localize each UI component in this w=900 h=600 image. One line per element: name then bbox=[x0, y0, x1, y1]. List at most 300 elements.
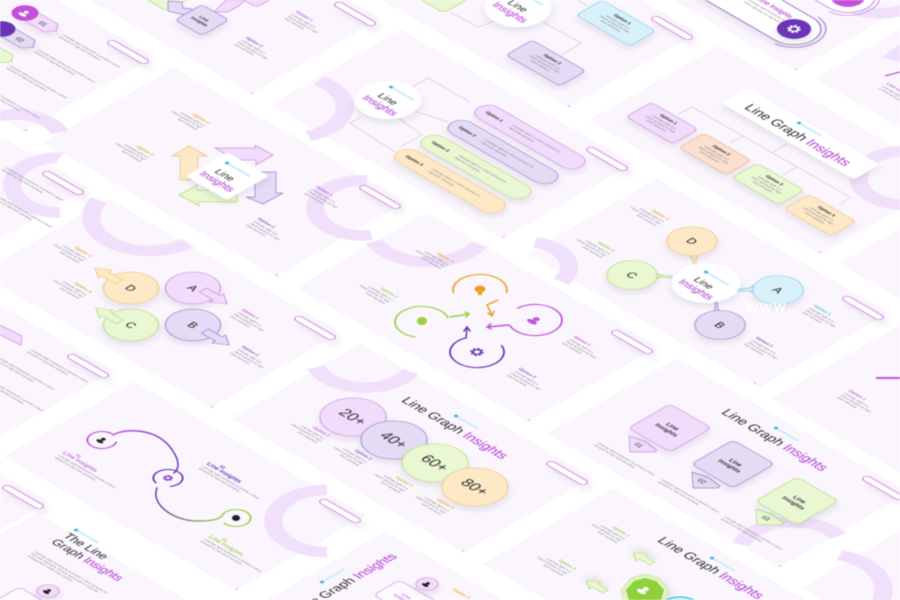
card text: Line bbox=[400, 593, 413, 600]
option 1 text: robust synopsis for high bbox=[290, 423, 323, 442]
curve bottom bbox=[156, 488, 222, 521]
description 03: Leverage agile frameworks to provide a robust bbox=[723, 515, 783, 550]
option 3 text: Option 3 bbox=[73, 282, 94, 294]
bar option 3 bbox=[415, 132, 537, 202]
connector lines bbox=[350, 78, 470, 152]
option 3 text: Leverage agile to a bbox=[382, 474, 409, 490]
option 3 text: level overviews. bbox=[58, 287, 81, 300]
option 2 text: Leverage agile to a bbox=[236, 348, 263, 364]
option 2 text: level overviews. bbox=[233, 43, 256, 56]
panel: curved line timeline bbox=[53, 430, 273, 575]
option 1 text: robust synopsis for high bbox=[306, 190, 339, 209]
footer dots bbox=[24, 68, 822, 590]
option 3 text: level overviews. bbox=[120, 150, 143, 163]
panel: ABCD circles with arrows bbox=[49, 238, 274, 371]
card option 3: robust synopsis for high bbox=[750, 176, 783, 195]
node bulb bbox=[218, 508, 254, 528]
arrow A bbox=[196, 286, 234, 308]
option 2 text: level overviews. bbox=[743, 343, 766, 356]
option 1 text: level overviews. bbox=[296, 431, 319, 444]
circle 20+ bbox=[306, 390, 400, 444]
bubble B: B bbox=[711, 321, 728, 330]
option 1 text: robust synopsis for high bbox=[839, 394, 872, 413]
square 02: Insights bbox=[716, 459, 743, 474]
number 03: 03 bbox=[759, 515, 772, 522]
option 3 text bbox=[49, 274, 94, 300]
label 03: 03 bbox=[220, 537, 229, 543]
option 1 text: Leverage agile to a bbox=[290, 13, 317, 29]
option 3 text: level overviews. bbox=[581, 246, 604, 259]
description text: Leverage agile frameworks to provide a robust bbox=[61, 33, 121, 68]
option 1 text: level overviews. bbox=[229, 315, 252, 328]
panel: left edge lilac tag bbox=[0, 322, 89, 414]
option 1 text: Leverage agile to a bbox=[299, 424, 326, 440]
circle C: C bbox=[122, 321, 139, 331]
option 4 text bbox=[411, 490, 456, 516]
hub circle bbox=[471, 0, 565, 35]
bar option 4 bbox=[389, 146, 511, 216]
option 3 text: robust synopsis for high bbox=[373, 473, 406, 492]
option 1 text: Option 1 bbox=[812, 304, 833, 316]
description 02: Leverage agile frameworks to provide a robust bbox=[660, 478, 720, 513]
option 1 text: robust synopsis for high bbox=[804, 309, 837, 328]
accent bar bbox=[224, 161, 251, 177]
option 4 text: level overviews. bbox=[420, 257, 443, 270]
circle A bbox=[154, 266, 232, 310]
option 2 text: Option 2 bbox=[754, 336, 775, 348]
option 1 text: level overviews. bbox=[836, 396, 859, 409]
option 3 text: robust synopsis for high bbox=[114, 142, 147, 161]
label 01: 01 bbox=[74, 453, 83, 459]
bar option 1: high level overviews. bbox=[507, 126, 536, 143]
description text: synopsis for high level overviews. bbox=[5, 66, 49, 92]
option 4 text: level overviews. bbox=[58, 251, 81, 264]
accent bar bbox=[319, 568, 346, 584]
blue shape bbox=[658, 597, 702, 600]
bubble A: A bbox=[769, 286, 786, 296]
bar option 2 bbox=[442, 117, 564, 187]
title: Line Graph Insights bbox=[741, 102, 855, 168]
option 4 text bbox=[626, 201, 671, 227]
title: Line Graph Insights bbox=[654, 535, 768, 600]
Line Insights square: Insights bbox=[190, 16, 210, 27]
circle B bbox=[154, 302, 232, 348]
option 1 text: level overviews. bbox=[283, 17, 306, 30]
cropped green box bbox=[390, 0, 470, 13]
lilac arrow bbox=[214, 0, 245, 12]
option 3 text: Option 3 bbox=[379, 287, 400, 299]
accent bar bbox=[388, 85, 415, 101]
option 2 text bbox=[743, 336, 788, 362]
square 03 bbox=[755, 477, 839, 525]
watermark: WWW. bbox=[746, 300, 792, 315]
option 2 text: Leverage agile to a bbox=[240, 39, 267, 55]
option 2 text: robust synopsis for high bbox=[332, 446, 365, 465]
panel: gear capsule slide bbox=[657, 0, 896, 57]
label 01 bbox=[53, 448, 127, 491]
arrow left green bbox=[179, 185, 237, 206]
option 2 text bbox=[506, 367, 551, 393]
option 2 text: Option 2 bbox=[353, 449, 374, 461]
card option 2: Leverage agile to a bbox=[703, 145, 730, 161]
person badge bbox=[411, 575, 443, 593]
hub circle bbox=[341, 73, 435, 127]
circle 60+ bbox=[388, 436, 482, 490]
accent bar bbox=[796, 121, 823, 137]
box option 1 bbox=[576, 0, 656, 46]
option 1 text: robust synopsis for high bbox=[232, 313, 265, 332]
option 3 text bbox=[572, 233, 617, 259]
connector stub bbox=[885, 72, 900, 76]
bar option 4: Leverage agile to a robust synopsis for bbox=[431, 168, 483, 198]
option 3 text bbox=[355, 279, 400, 305]
card option 4 bbox=[784, 194, 856, 236]
Line Insights square bbox=[175, 4, 229, 36]
box option 1: robust synopsis for high bbox=[598, 15, 631, 34]
tail A bbox=[738, 284, 757, 295]
option 3 text: level overviews. bbox=[364, 292, 387, 305]
circle 80+ bbox=[428, 460, 522, 514]
option 1 text: Leverage agile to a bbox=[236, 311, 263, 327]
option 1 text: robust synopsis for high bbox=[564, 340, 597, 359]
card option 3 bbox=[732, 163, 804, 205]
option 2 text bbox=[245, 217, 290, 243]
bar option 3: Option 3 bbox=[430, 141, 451, 153]
number 02: 02 bbox=[695, 478, 708, 485]
box option 1: Leverage agile to a bbox=[604, 14, 631, 30]
option 4 text: robust synopsis for high bbox=[414, 249, 447, 268]
option 4 text bbox=[49, 238, 94, 264]
accent bar bbox=[517, 0, 544, 6]
center card title bbox=[196, 165, 246, 194]
card option 1: Leverage agile to a bbox=[650, 114, 677, 130]
card option 3: Option 3 bbox=[764, 174, 785, 186]
option 1 text: Option 1 bbox=[847, 389, 868, 401]
description text: Leverage agile frameworks to provide a robust bbox=[36, 48, 96, 83]
title: Graph Insights bbox=[48, 537, 127, 583]
circle 80+: 80+ bbox=[456, 477, 493, 498]
option 2 text: Leverage agile to a bbox=[750, 339, 777, 355]
option 3 text: robust synopsis for high bbox=[52, 279, 85, 298]
option 1 text bbox=[801, 304, 846, 330]
box option 1: level overviews. bbox=[599, 19, 622, 33]
square 02 bbox=[691, 440, 775, 488]
capsule 2 bbox=[711, 0, 896, 25]
bar option 2: Leverage agile to a robust synopsis for bbox=[484, 139, 536, 169]
label 02 bbox=[197, 459, 271, 502]
option 4 text: Leverage agile to a bbox=[179, 111, 206, 127]
option 1 text bbox=[561, 335, 606, 361]
circle A: A bbox=[184, 284, 201, 294]
label 03: synopsis for high level overviews. bbox=[199, 540, 244, 566]
card option 1: level overviews. bbox=[645, 119, 668, 133]
option 4 text: Leverage agile to a bbox=[423, 250, 450, 266]
accent bar bbox=[73, 528, 100, 544]
hub title: Insights bbox=[489, 1, 530, 25]
description text: Leverage agile frameworks to provide a robust bbox=[8, 64, 68, 99]
label 01: Leverage agile frameworks to provide a robust bbox=[57, 454, 117, 489]
description text: synopsis for high level overviews. bbox=[26, 350, 70, 376]
label 03: Line Insights bbox=[206, 534, 246, 557]
bubble D: D bbox=[683, 237, 700, 247]
card option 2: Option 2 bbox=[711, 144, 732, 156]
description text: Leverage agile frameworks to provide a robust bbox=[4, 166, 64, 201]
panel: four arrows slide bbox=[111, 105, 348, 243]
accent bar bbox=[703, 270, 730, 286]
option 1 text: level overviews. bbox=[561, 342, 584, 355]
option 2 text: level overviews. bbox=[506, 374, 529, 387]
option 2 text: Option 2 bbox=[244, 36, 265, 48]
description text: synopsis for high level overviews. bbox=[1, 168, 45, 194]
label 02: Line Insights bbox=[204, 461, 244, 484]
option 3 text: Leverage agile to a bbox=[61, 280, 88, 296]
cropped lilac box bbox=[222, 0, 282, 8]
box option 2: Option 2 bbox=[542, 53, 563, 65]
tail 02 bbox=[692, 472, 720, 488]
panel: hexagon slide bbox=[451, 518, 768, 600]
box option 1: Option 1 bbox=[612, 13, 633, 25]
center card title: Insights bbox=[196, 170, 237, 194]
card option 4: level overviews. bbox=[803, 211, 826, 225]
option 4 text: Option 4 bbox=[73, 246, 94, 258]
tag 02: 02 bbox=[13, 36, 26, 44]
option 2 text: Leverage agile to a bbox=[341, 447, 368, 463]
circle 60+: 60+ bbox=[416, 453, 453, 474]
description text: synopsis for high level overviews. bbox=[33, 50, 77, 76]
green arc with bulb bbox=[389, 303, 469, 341]
description: Leverage agile frameworks to provide a robust synopsis for bbox=[33, 550, 110, 595]
bar option 1: Option 1 bbox=[484, 111, 505, 123]
option 3 text: robust synopsis for high bbox=[358, 284, 391, 303]
hub title: Insights bbox=[675, 278, 716, 302]
description: strategy foster collaborative thinking. bbox=[26, 554, 75, 582]
option 2 text: level overviews. bbox=[229, 352, 252, 365]
panel: right edge insight label bbox=[877, 72, 900, 116]
title: The Line bbox=[60, 531, 113, 561]
connector lines bbox=[450, 0, 587, 55]
arrow up orange bbox=[172, 146, 207, 180]
option 1 text: Leverage agile to a bbox=[808, 307, 835, 323]
label 02: Leverage agile frameworks to provide a robust bbox=[201, 465, 261, 500]
arrow lower bbox=[580, 577, 612, 595]
option 2 text: Option 2 bbox=[557, 559, 578, 571]
option 3 text bbox=[111, 137, 156, 163]
label 02: 02 bbox=[218, 464, 227, 470]
card option 2 bbox=[679, 133, 751, 175]
option 4 text: level overviews. bbox=[420, 503, 443, 516]
option 3 text: Leverage agile to a bbox=[123, 143, 150, 159]
tail B bbox=[711, 302, 725, 315]
card option 1: Option 1 bbox=[658, 113, 679, 125]
outlined card bbox=[373, 580, 443, 600]
option 1 text: robust synopsis for high bbox=[286, 15, 319, 34]
title: Line Graph Insights bbox=[398, 395, 512, 461]
outlined card bbox=[0, 587, 63, 600]
lilac arc with person bbox=[487, 298, 573, 342]
box option 2: robust synopsis for high bbox=[528, 55, 561, 74]
person icon bbox=[635, 585, 652, 595]
option 1 text: Option 1 bbox=[311, 426, 332, 438]
description text bbox=[0, 348, 89, 414]
option 4 text: Option 4 bbox=[435, 252, 456, 264]
capsule 1 bbox=[657, 0, 842, 57]
bubble B bbox=[684, 304, 756, 346]
option 1 text bbox=[287, 418, 332, 444]
accent bar bbox=[773, 426, 800, 442]
option 4 text: Leverage agile to a bbox=[61, 244, 88, 260]
hub title: Insights bbox=[359, 94, 400, 118]
tail D bbox=[689, 254, 699, 270]
node gear bbox=[148, 466, 188, 490]
option 1 text: Option 1 bbox=[572, 335, 593, 347]
label 01: Line Insights bbox=[60, 450, 100, 473]
circle D bbox=[92, 266, 170, 310]
card option 2: level overviews. bbox=[698, 150, 721, 164]
option 3 text: Leverage agile to a bbox=[584, 239, 611, 255]
option 1 text: Option 1 bbox=[240, 308, 261, 320]
option 3 text: Leverage agile to a bbox=[367, 285, 394, 301]
option 1 text: level overviews. bbox=[303, 192, 326, 205]
Line Insights square: Line bbox=[198, 15, 211, 23]
option 2 text: Option 2 bbox=[517, 367, 538, 379]
hub title: Line bbox=[374, 92, 400, 107]
bar option 1: Leverage agile to a robust synopsis for bbox=[511, 124, 563, 154]
hub circle bbox=[658, 255, 754, 311]
option 2 text: level overviews. bbox=[542, 564, 565, 577]
gold arc with trophy bbox=[449, 272, 511, 316]
option 2 text: robust synopsis for high bbox=[248, 222, 281, 241]
description: high level overviews. Iterative approaches to corporate bbox=[30, 552, 100, 593]
number 01: 01 bbox=[632, 442, 645, 449]
option 2 text: Option 2 bbox=[240, 345, 261, 357]
curve top bbox=[113, 431, 178, 473]
description 01: Leverage agile frameworks to provide a robust bbox=[596, 441, 656, 476]
bar option 4: high level overviews. bbox=[427, 170, 456, 187]
box option 2: Leverage agile to a bbox=[534, 54, 561, 70]
card option 3: level overviews. bbox=[751, 180, 774, 194]
arrow down purple bbox=[246, 172, 283, 204]
panel: top arrows slide bbox=[113, 0, 328, 62]
option 1 text: Option 1 bbox=[314, 185, 335, 197]
description 03: synopsis for high level overviews. bbox=[720, 517, 764, 543]
option 1 text bbox=[836, 389, 881, 415]
card option 4: Option 4 bbox=[816, 205, 837, 217]
card option 4: Leverage agile to a bbox=[808, 206, 835, 222]
circle 40+: 40+ bbox=[375, 430, 412, 451]
option 4 text: robust synopsis for high bbox=[52, 243, 85, 262]
tag 01 bbox=[6, 2, 66, 36]
option 2 text: level overviews. bbox=[338, 454, 361, 467]
option 4 text: Option 4 bbox=[435, 498, 456, 510]
panel: right edge option bbox=[836, 378, 900, 415]
option 2 text bbox=[229, 345, 274, 371]
option 1 text bbox=[283, 10, 328, 36]
panel: bottom ascending title bbox=[290, 551, 443, 600]
purple stroke bbox=[876, 377, 900, 379]
card option 2: robust synopsis for high bbox=[697, 146, 730, 165]
option 1 text bbox=[587, 518, 632, 544]
accent bar bbox=[453, 414, 480, 430]
panel: The Line Graph Insights bbox=[0, 528, 141, 600]
option 1 text: Leverage agile to a bbox=[599, 524, 626, 540]
circle B: B bbox=[184, 321, 201, 330]
panel: circular line arrows bbox=[355, 244, 606, 393]
option 3 text: Option 3 bbox=[135, 145, 156, 157]
center card bbox=[185, 152, 269, 200]
accent bar bbox=[709, 556, 736, 572]
hub title bbox=[359, 89, 409, 118]
circle 20+: 20+ bbox=[334, 407, 371, 428]
option 1 text: Option 1 bbox=[294, 10, 315, 22]
option 1 text: Option 1 bbox=[611, 526, 632, 538]
option 3 text bbox=[370, 468, 415, 494]
option 2 text: Option 2 bbox=[256, 217, 277, 229]
option 2 text: Leverage agile to a bbox=[545, 557, 572, 573]
connector lines bbox=[677, 107, 850, 205]
square 01 bbox=[628, 404, 712, 452]
option 2 text bbox=[533, 551, 578, 577]
arrow upper bbox=[627, 549, 659, 567]
square 03: Line bbox=[791, 495, 808, 505]
option 4 text: Leverage agile to a bbox=[423, 496, 450, 512]
title: Line Graph Insights bbox=[718, 407, 832, 473]
purple arc with gear bbox=[441, 327, 513, 373]
option 4 text: Option 4 bbox=[650, 209, 671, 221]
hexagon outer bbox=[621, 574, 669, 600]
option 4 text: level overviews. bbox=[176, 118, 199, 131]
card text bbox=[392, 591, 416, 600]
arrow D bbox=[88, 264, 126, 286]
option 1 text: Leverage agile to a bbox=[843, 392, 870, 408]
option 2 text: robust synopsis for high bbox=[509, 372, 542, 391]
option 2 text: level overviews. bbox=[245, 224, 268, 237]
card option 1 bbox=[626, 102, 698, 144]
bubble C bbox=[596, 254, 668, 296]
option 1 text: level overviews. bbox=[801, 311, 824, 324]
option 1 text: robust synopsis for high bbox=[590, 523, 623, 542]
bar option 2: high level overviews. bbox=[480, 141, 509, 158]
option 4 text: Option 4 bbox=[191, 113, 212, 125]
option 2 text: Leverage agile to a bbox=[252, 220, 279, 236]
option 1 text bbox=[229, 308, 274, 334]
option 2 text: robust synopsis for high bbox=[746, 341, 779, 360]
person badge bbox=[32, 582, 64, 600]
center card title: Line bbox=[211, 168, 237, 183]
label 03: Leverage agile frameworks to provide a robust bbox=[203, 538, 263, 573]
bubble C: C bbox=[623, 271, 640, 281]
bar option 3: high level overviews. bbox=[453, 156, 482, 173]
option 1 text bbox=[303, 185, 348, 211]
panel: left edge upper text bbox=[0, 166, 64, 230]
card option 4: robust synopsis for high bbox=[802, 207, 835, 226]
tag 03 bbox=[0, 40, 18, 66]
square 02: Line bbox=[727, 458, 744, 468]
hub title bbox=[675, 273, 725, 302]
option 2 text: robust synopsis for high bbox=[236, 41, 269, 60]
panel: hub with option boxes bbox=[390, 0, 656, 86]
description text bbox=[0, 33, 121, 121]
option 1 text: Leverage agile to a bbox=[568, 338, 595, 354]
option 3 text: robust synopsis for high bbox=[575, 238, 608, 257]
hub title: Line bbox=[690, 276, 716, 291]
square 01: Line bbox=[664, 422, 681, 432]
box option 2: level overviews. bbox=[529, 59, 552, 73]
description text: synopsis for high level overviews. bbox=[58, 35, 102, 61]
panel: callout squares bbox=[593, 404, 839, 552]
description text: Leverage agile frameworks to provide a robust bbox=[29, 348, 89, 383]
panel: numbered tags top left bbox=[0, 2, 121, 121]
panel: hub with long bars bbox=[341, 73, 591, 216]
